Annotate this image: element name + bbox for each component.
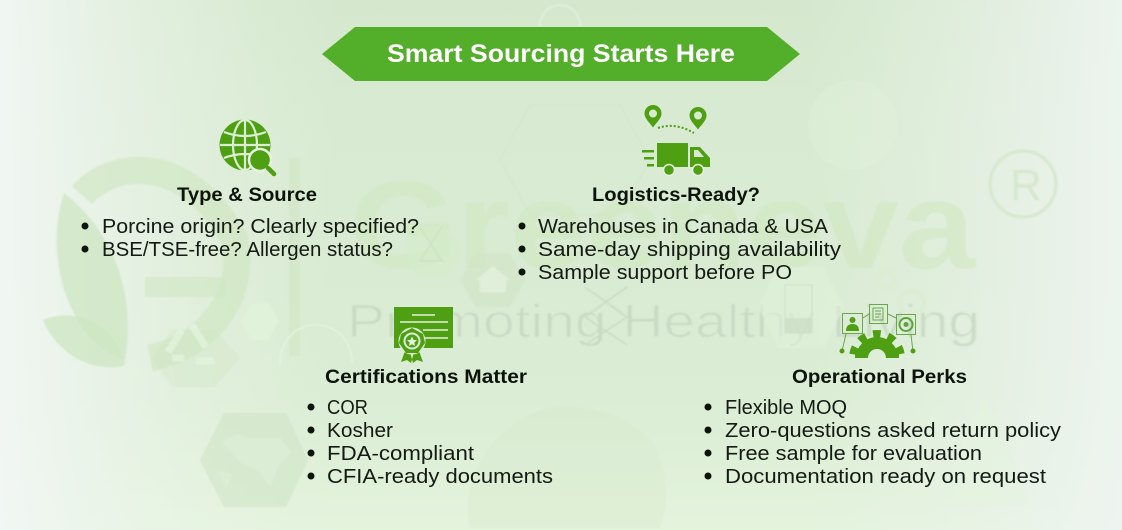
- figure: [468, 406, 666, 528]
- bullet list: CFIA-ready documents: [327, 466, 553, 488]
- bullet list: Kosher: [327, 420, 393, 442]
- heading: Logistics-Ready?: [592, 185, 760, 206]
- bullet list: [518, 216, 841, 284]
- heading: Type & Source: [177, 185, 317, 206]
- icon: truck with map pins: [642, 105, 710, 176]
- bullet list: Flexible MOQ: [725, 397, 847, 419]
- gears: [879, 272, 895, 288]
- faint circle top: [808, 80, 898, 170]
- title ribbon: [322, 27, 800, 81]
- bullet list: [82, 216, 419, 261]
- background with faded watermark: Promoting Healthy Living: [347, 295, 980, 347]
- title text: Smart Sourcing Starts Here: [387, 40, 735, 68]
- bullet list: [308, 397, 553, 488]
- bullet list: Sample support before PO: [538, 262, 792, 284]
- panel: operational perks: [704, 304, 1061, 488]
- bullet list: COR: [327, 397, 368, 419]
- recycling and bulb: [168, 325, 214, 361]
- bullet list: Zero-questions asked return policy: [725, 420, 1061, 442]
- panel: certifications: [308, 307, 553, 488]
- bullet list: FDA-compliant: [327, 443, 474, 465]
- background with faded watermark: R: [1010, 161, 1042, 210]
- heading: Operational Perks: [792, 367, 967, 388]
- heading: Certifications Matter: [325, 367, 528, 388]
- bullet list: Free sample for evaluation: [725, 443, 982, 465]
- bullet list: Porcine origin? Clearly specified?: [102, 216, 419, 238]
- bullet list: BSE/TSE-free? Allergen status?: [102, 239, 393, 261]
- bullet list: Same-day shipping availability: [538, 239, 841, 261]
- bullet list: Warehouses in Canada & USA: [538, 216, 829, 238]
- icon: globe with magnifier: [220, 120, 274, 174]
- icon: gear with linked cards: [840, 304, 916, 358]
- panel: logistics: [518, 105, 841, 284]
- icon: certificate with rosette: [394, 307, 453, 363]
- dna: [420, 227, 444, 261]
- bullet list: [704, 397, 1061, 488]
- hexagons: [240, 303, 279, 340]
- background with faded watermark: Greeneva: [350, 157, 976, 295]
- bullet list: Documentation ready on request: [725, 466, 1046, 488]
- panel: type and source: [82, 120, 419, 261]
- leaf logo: [82, 170, 237, 358]
